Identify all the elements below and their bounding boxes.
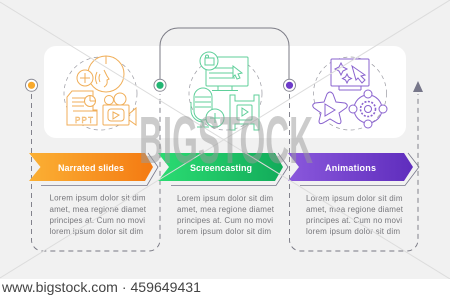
banner: screencasting bbox=[158, 153, 288, 186]
text block: animations: lorem ipsum dolor sit dim bbox=[306, 227, 400, 236]
arrow marker: end of timeline bbox=[413, 81, 423, 92]
banner: screencasting: Screencasting bbox=[190, 163, 252, 173]
text block: animations bbox=[306, 194, 404, 236]
icon: screencasting bbox=[189, 52, 262, 130]
text block: screencasting: amet, mea regione diamet bbox=[177, 205, 275, 214]
banner: narrated slides: Narrated slides bbox=[58, 163, 124, 173]
footer bar bbox=[0, 279, 450, 299]
text block: screencasting bbox=[177, 194, 275, 236]
timeline marker: green bbox=[154, 79, 166, 91]
white icon panel bbox=[44, 46, 406, 138]
text block: narrated slides: amet, mea regione diamet bbox=[50, 205, 147, 214]
text block: narrated slides: principes at. Cum no movi bbox=[50, 216, 145, 225]
text block: narrated slides: Lorem ipsum dolor sit dim bbox=[50, 194, 146, 202]
icon: narrated slides bbox=[64, 56, 137, 130]
text block: screencasting: Lorem ipsum dolor sit dim bbox=[177, 194, 273, 203]
text block: animations: amet, mea regione diamet bbox=[306, 205, 404, 214]
banner: animations: Animations bbox=[325, 163, 376, 173]
text block: screencasting: principes at. Cum no movi bbox=[177, 216, 273, 225]
icon: narrated slides: PPT bbox=[75, 116, 93, 125]
center highlight outline bbox=[160, 28, 289, 85]
timeline marker: orange bbox=[26, 79, 38, 91]
dashed timeline connectors bbox=[32, 94, 418, 251]
footer credit: www.bigstock.com · 459649431 bbox=[1, 279, 201, 295]
banner: narrated slides bbox=[29, 153, 158, 186]
icon: animations bbox=[313, 57, 387, 130]
timeline marker: purple bbox=[284, 79, 296, 91]
text block: narrated slides: lorem ipsum dolor sit dim bbox=[50, 227, 143, 236]
banner: animations bbox=[288, 153, 419, 186]
text block: narrated slides bbox=[50, 194, 147, 236]
text block: screencasting: lorem ipsum dolor sit dim bbox=[177, 227, 271, 236]
text block: animations: principes at. Cum no movi bbox=[306, 216, 402, 225]
text block: animations: Lorem ipsum dolor sit dim bbox=[306, 194, 403, 203]
